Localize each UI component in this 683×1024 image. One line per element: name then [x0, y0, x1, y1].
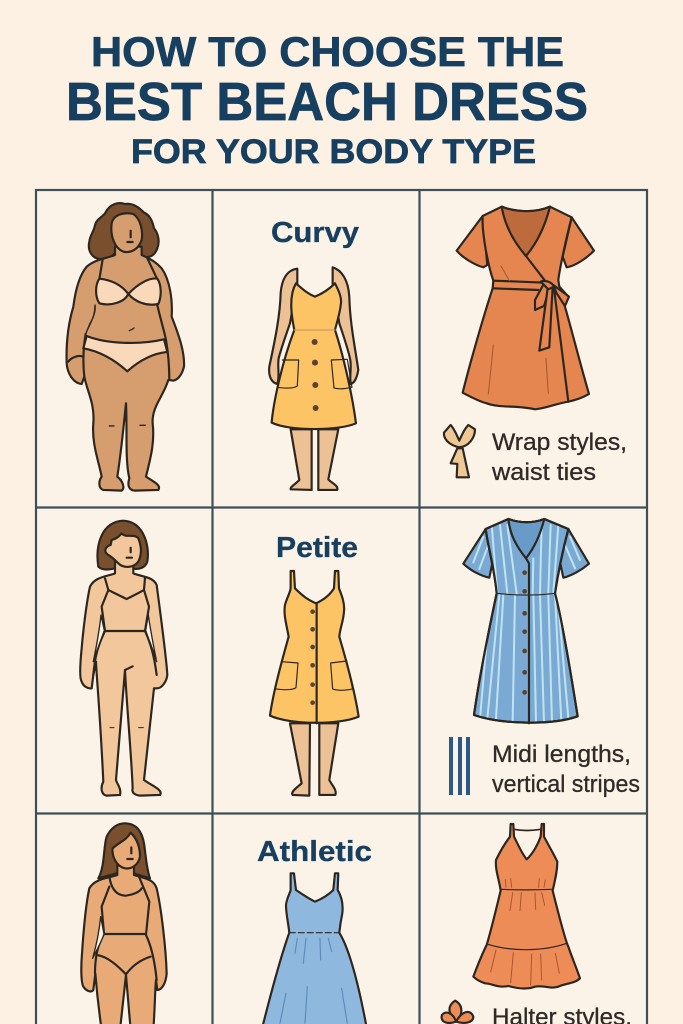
text: wrap styles: waist ties	[491, 459, 596, 486]
dress: orange wrap	[457, 207, 594, 409]
dress on curvy figure	[269, 267, 358, 490]
heading: Petite: Petite	[276, 532, 358, 564]
heading: Athletic: Athletic	[257, 836, 372, 868]
figure: curvy body	[67, 203, 184, 491]
text: midi lengths	[492, 741, 640, 798]
heading: Curvy: Curvy	[271, 217, 359, 249]
text: wrap styles: Wrap styles,	[492, 429, 627, 456]
icon: waist tie	[444, 425, 475, 477]
dress on petite figure	[270, 571, 359, 796]
text: midi lengths: Midi lengths,	[492, 741, 631, 768]
title: FOR YOUR BODY TYPE	[131, 133, 536, 171]
dress: blue striped midi	[463, 519, 589, 723]
title: BEST BEACH DRESS	[66, 72, 588, 132]
dress on athletic figure	[260, 873, 368, 1024]
text: midi lengths: vertical stripes	[492, 771, 640, 798]
icon: flower	[442, 1001, 473, 1023]
panel: comparison grid	[36, 190, 647, 1024]
icon: vertical stripes	[449, 737, 470, 795]
figure: petite body	[80, 521, 167, 796]
title	[66, 28, 588, 171]
text: wrap styles	[491, 429, 627, 486]
title: HOW TO CHOOSE THE	[91, 28, 564, 75]
figure: athletic body	[81, 823, 167, 1024]
dress: orange halter	[473, 824, 580, 989]
